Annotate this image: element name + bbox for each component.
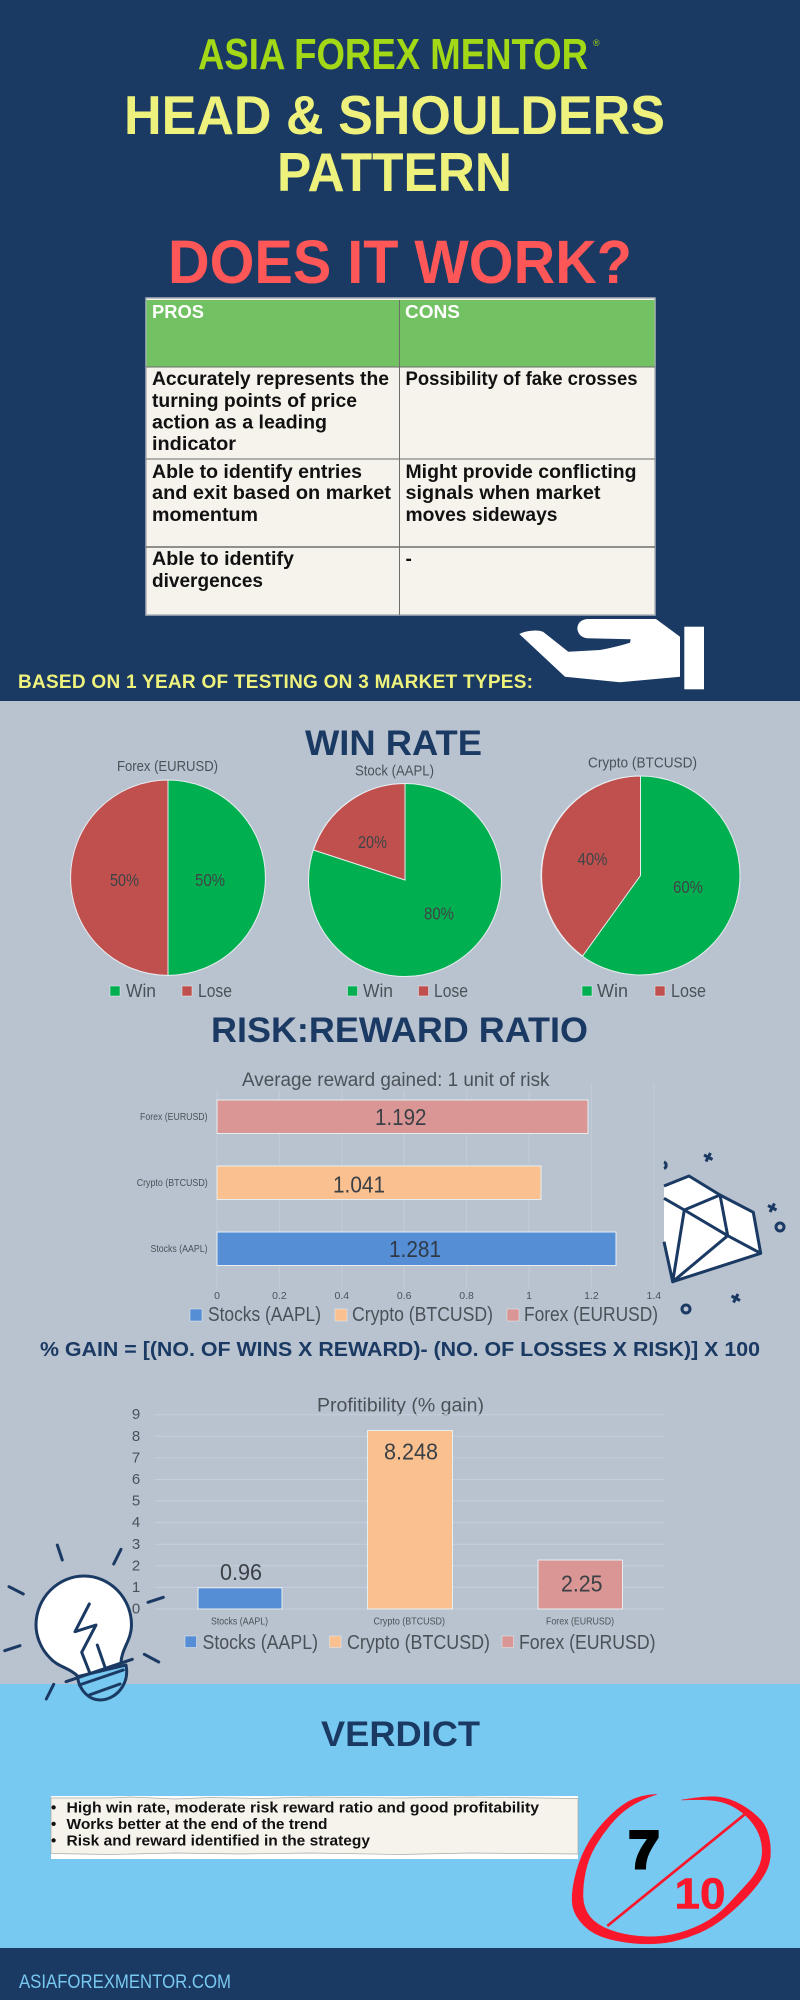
row 3 text: divergences — [152, 571, 263, 592]
row 1 text: action as a leading — [152, 412, 327, 434]
row 3 text — [152, 549, 412, 592]
row 2 text: Might provide conflicting — [406, 462, 636, 483]
icon: light bulb — [5, 1545, 163, 1700]
bar: forex: 2.25 — [561, 1570, 602, 1596]
category labels — [211, 1616, 614, 1628]
value axis labels: 0 — [214, 1290, 220, 1302]
chart: forex pie: 50% — [195, 870, 225, 890]
legend: Stocks (AAPL) — [202, 1632, 318, 1654]
title — [124, 85, 665, 203]
value axis labels: 0.6 — [397, 1290, 412, 1302]
chart: stock pie: 80% — [424, 904, 454, 924]
legend: Forex (EURUSD) — [524, 1304, 658, 1326]
table: pros and cons — [146, 298, 655, 615]
row 2 text: signals when market — [406, 483, 601, 504]
category labels: Stocks (AAPL) — [150, 1243, 208, 1255]
bar: stocks: 0.96 — [220, 1559, 262, 1585]
row 1 text: Possibility of fake crosses — [406, 369, 638, 390]
row 3 text: Able to identify — [152, 549, 294, 570]
y axis labels: 5 — [132, 1492, 140, 1510]
icon: diamond with sparkles — [664, 1153, 784, 1313]
panel: results background — [0, 701, 800, 1684]
bar: forex — [538, 1560, 622, 1609]
y axis labels: 0 — [132, 1600, 140, 1618]
heading: verdict: VERDICT — [321, 1715, 480, 1754]
chart: crypto pie: Crypto (BTCUSD) — [588, 754, 697, 772]
chart: crypto pie: 40% — [578, 849, 608, 869]
legend — [185, 1632, 656, 1654]
text box: verdict points: High win rate, moderate risk reward ratio and good profitability — [66, 1799, 540, 1816]
legend — [582, 981, 706, 1001]
text box: verdict points — [51, 1796, 578, 1859]
table header — [146, 300, 654, 367]
legend: Lose — [198, 981, 232, 1001]
category labels: Stocks (AAPL) — [211, 1616, 268, 1628]
chart: forex pie: Forex (EURUSD) — [117, 758, 218, 775]
row 1 text: indicator — [152, 434, 237, 455]
heading: win rate: WIN RATE — [305, 724, 482, 763]
y axis labels: 7 — [132, 1450, 140, 1466]
panel: footer background — [0, 1948, 800, 2000]
category labels — [137, 1111, 208, 1255]
text: testing basis: BASED ON 1 YEAR OF TESTING ON 3 MARKET TYPES: — [18, 672, 533, 693]
legend — [110, 981, 232, 1001]
category labels: Forex (EURUSD) — [140, 1111, 208, 1123]
formula: percent gain: % GAIN = [(NO. OF WINS X REWARD)- (NO. OF LOSSES X RISK)] X 100 — [40, 1339, 760, 1361]
row 2 text — [152, 462, 636, 526]
logo: Asia Forex Mentor: ® — [593, 38, 600, 48]
score: 7 out of 10 — [572, 1794, 770, 1944]
row 1 text: turning points of price — [152, 391, 357, 412]
footer: website: ASIAFOREXMENTOR.COM — [19, 1971, 231, 1993]
legend: Crypto (BTCUSD) — [347, 1632, 490, 1654]
panel: header background — [0, 0, 800, 701]
legend: Win — [597, 981, 628, 1001]
category labels: Crypto (BTCUSD) — [137, 1177, 208, 1189]
value axis labels — [214, 1290, 661, 1302]
chart: forex pie — [71, 758, 265, 1001]
chart: average reward bar chart — [137, 1070, 661, 1326]
category labels: Crypto (BTCUSD) — [374, 1616, 445, 1628]
chart: forex pie: 50% — [110, 870, 139, 890]
value axis labels: 1.2 — [584, 1290, 599, 1302]
legend — [348, 981, 468, 1001]
table header: CONS — [405, 302, 460, 322]
category labels: Forex (EURUSD) — [546, 1616, 614, 1628]
text box: verdict points: Risk and reward identified in the strategy — [66, 1833, 371, 1850]
row 2 text: moves sideways — [406, 505, 558, 526]
row 1 text — [152, 369, 638, 455]
row 2 text: and exit based on market — [152, 483, 392, 504]
score: 7 out of 10: 10 — [674, 1869, 726, 1918]
y axis labels: 2 — [132, 1558, 140, 1574]
bar: crypto — [217, 1166, 541, 1200]
chart: crypto pie: 60% — [673, 877, 703, 897]
row 3 text: - — [406, 549, 412, 570]
score: 7 out of 10: 7 — [628, 1821, 660, 1880]
chart: stock pie — [308, 762, 502, 1001]
y axis labels: 9 — [132, 1406, 140, 1423]
y axis labels: 6 — [132, 1471, 140, 1488]
text box: verdict points: Works better at the end of the trend — [66, 1816, 328, 1833]
value axis labels: 0.4 — [334, 1290, 349, 1302]
y axis labels — [132, 1406, 140, 1618]
bar: stocks — [217, 1232, 616, 1266]
legend: Win — [363, 981, 393, 1001]
bar: forex: 1.192 — [375, 1104, 426, 1130]
title: PATTERN — [277, 142, 512, 203]
chart: stock pie: 20% — [358, 832, 387, 852]
text box: verdict points: • — [51, 1833, 56, 1850]
text box: verdict points: • — [51, 1816, 56, 1833]
panel: verdict background — [0, 1684, 800, 1948]
icon: open hand — [519, 619, 704, 689]
bar: forex — [217, 1100, 588, 1134]
y axis labels: 4 — [132, 1514, 140, 1531]
y axis labels: 8 — [132, 1428, 140, 1445]
chart: average reward bar chart: Average reward gained: 1 unit of risk — [242, 1070, 550, 1091]
bar: crypto: 1.041 — [333, 1172, 385, 1198]
value axis labels: 1 — [526, 1290, 532, 1302]
value axis labels: 0.2 — [272, 1290, 287, 1302]
chart: stock pie: Stock (AAPL) — [355, 762, 434, 780]
legend — [190, 1304, 658, 1326]
legend: Lose — [671, 981, 706, 1001]
row 2 text: Able to identify entries — [152, 462, 362, 483]
legend: Forex (EURUSD) — [519, 1632, 656, 1654]
bar: stocks — [198, 1559, 282, 1609]
legend: Win — [126, 981, 156, 1001]
value axis labels: 1.4 — [646, 1290, 661, 1302]
title: HEAD & SHOULDERS — [124, 85, 665, 146]
value axis labels: 0.8 — [459, 1290, 474, 1302]
y axis labels: 3 — [132, 1536, 140, 1553]
bar: stocks: 1.281 — [389, 1236, 441, 1262]
chart: profitability column chart: Profitibility (% gain) — [317, 1396, 484, 1416]
row 1 text: Accurately represents the — [152, 369, 389, 390]
bar: crypto: 8.248 — [384, 1438, 438, 1464]
y axis labels: 1 — [132, 1579, 140, 1596]
legend: Stocks (AAPL) — [208, 1304, 321, 1326]
legend: Crypto (BTCUSD) — [352, 1304, 493, 1326]
chart: profitability column chart — [132, 1396, 665, 1654]
text box: verdict points: • — [51, 1799, 56, 1816]
heading: does it work: DOES IT WORK? — [168, 228, 632, 297]
heading: risk reward ratio: RISK:REWARD RATIO — [211, 1011, 588, 1050]
logo: Asia Forex Mentor: ASIA FOREX MENTOR — [198, 30, 588, 79]
bar: crypto — [368, 1430, 452, 1609]
chart: crypto pie — [541, 754, 740, 1001]
row 2 text: momentum — [152, 505, 258, 526]
table header: PROS — [152, 302, 204, 322]
legend: Lose — [434, 981, 468, 1001]
